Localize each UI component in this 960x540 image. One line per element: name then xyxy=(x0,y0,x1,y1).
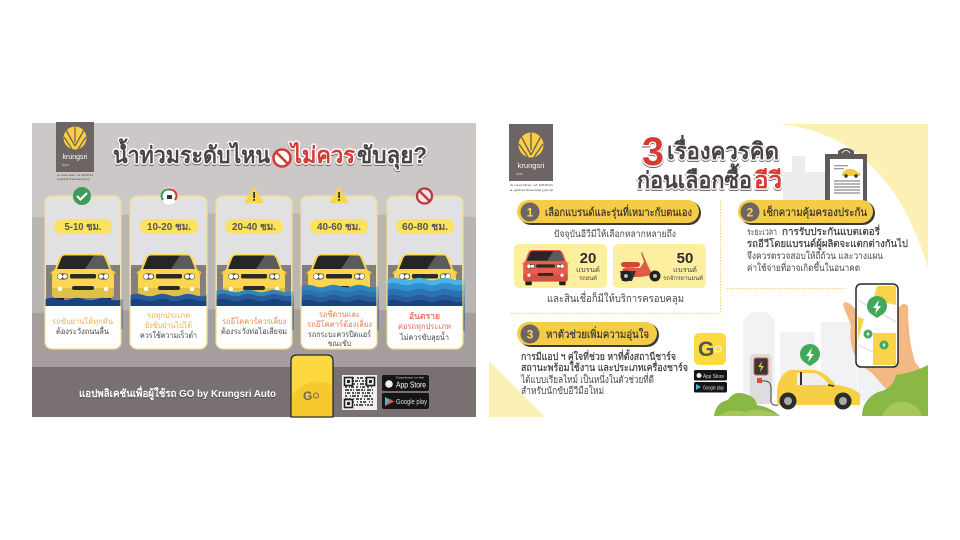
text: card note: ขณะขับ xyxy=(328,339,351,348)
pill: step 2 heading: 2 xyxy=(747,206,754,220)
title: three things to consider: ก่อนเลือกซื้อ xyxy=(637,163,752,193)
text: card note xyxy=(140,311,197,340)
text: card note: อันตราย xyxy=(409,311,440,321)
text: card note xyxy=(307,310,372,348)
box: motorcycle brands xyxy=(613,244,706,288)
box: motorcycle brands: แบรนด์ xyxy=(673,266,697,274)
text: step 2 body: รถอีวีโดยแบรนด์ผู้ผลิตจะแตกต่างกันไป xyxy=(747,237,908,250)
logo: krungsri auto: a global financial group xyxy=(57,177,90,181)
box: car brands: 20 xyxy=(580,250,596,267)
badge: app store: App Store xyxy=(396,380,426,390)
logo: krungsri auto: A member of MUFG xyxy=(510,183,554,187)
text: card note: ต้องระวังท่อไอเสียจม xyxy=(221,327,287,336)
label: depth xyxy=(396,219,454,234)
logo: krungsri auto: krungsri xyxy=(518,161,545,170)
badge: app store xyxy=(694,370,727,380)
text: step 3 body: การมีแอป ฯ คู่ใจที่ช่วย หาที่ตั้งสถานีชาร์จ xyxy=(521,349,676,363)
box: motorcycle brands: รถจักรยานยนต์ xyxy=(663,275,703,282)
text: card note: รถทุกประเภท xyxy=(147,311,190,320)
text: step 2 body: ระยะเวลา xyxy=(747,227,777,238)
card: 5-10 cm xyxy=(45,187,122,349)
card: 60-80 cm xyxy=(387,188,464,349)
icon: prohibition sign xyxy=(274,150,290,166)
icon: no entry xyxy=(417,188,432,204)
text: step 3 body: สำหรับนักขับอีวีมือใหม่ xyxy=(521,385,604,397)
panel: ev buying tips xyxy=(489,124,928,417)
text: card note: ต้องระวังถนนลื่น xyxy=(56,325,109,336)
text: step 2 body: การรับประกันแบตเตอรี่ xyxy=(782,224,881,238)
pill: step 1 heading: 1 xyxy=(527,206,534,220)
text: card note: รถอีโคคาร์ต้องเลี่ยง xyxy=(307,318,372,329)
text: card note: รถขับผ่านได้ทุกคัน xyxy=(52,317,113,326)
badge: app store xyxy=(382,375,429,391)
text: step 3 body xyxy=(520,349,688,397)
box: car brands xyxy=(514,244,607,288)
text: card note xyxy=(221,315,287,336)
box: car brands: รถยนต์ xyxy=(579,275,597,282)
title: flood level heading: ไม่ควร xyxy=(288,141,356,168)
panel: flood depth infographic xyxy=(32,122,476,417)
text: card note: รถกระบะควรปิดแอร์ xyxy=(308,329,372,339)
text: card note: ไม่ควรขับลุยน้ำ xyxy=(399,331,449,342)
text: credit available: และสินเชื่อก็มีให้บริการครอบคลุม xyxy=(547,291,684,305)
text: card note: ต่อรถทุกประเภท xyxy=(398,322,451,331)
illustration: yellow ev car xyxy=(777,370,860,410)
illustration: city buildings xyxy=(743,312,888,400)
illustration: green bushes xyxy=(714,365,928,416)
badge: google play xyxy=(382,393,429,409)
label: depth: 40-60 ชม. xyxy=(317,222,361,233)
pill: step 2 heading xyxy=(738,200,875,225)
badge: app store: Download on the xyxy=(396,376,424,380)
badge: google play: Google play xyxy=(396,399,427,406)
text: step 2 body: ค่าใช้จ่ายที่อาจเกิดขึ้นในอนาคต xyxy=(747,261,860,274)
text: card note: รถซีดานและ xyxy=(319,310,360,319)
box: motorcycle brands: 50 xyxy=(677,250,693,267)
icon: green check xyxy=(73,187,91,205)
pill: step 3 heading: หาตัวช่วยเพิ่มความอุ่นใจ xyxy=(546,326,649,341)
title: three things to consider xyxy=(637,130,782,193)
illustration: charger xyxy=(750,354,778,405)
label: depth xyxy=(140,219,198,234)
icon: go app xyxy=(694,333,726,365)
text: app banner: แอปพลิเคชันเพื่อผู้ใช้รถ GO by Krungsri Auto xyxy=(79,385,276,401)
icon: speed gauge xyxy=(160,188,178,204)
icon: warning xyxy=(330,188,348,202)
icon: charging pin xyxy=(800,344,820,366)
icon: red scooter xyxy=(620,252,660,282)
box: car brands: แบรนด์ xyxy=(576,266,600,274)
pill: step 3 heading xyxy=(517,322,659,347)
logo: krungsri auto: a global financial group xyxy=(510,188,553,192)
icon: smartphone map xyxy=(856,284,898,367)
title: flood level heading xyxy=(113,138,427,170)
title: flood level heading: ขับลุย? xyxy=(357,142,427,170)
text: card note xyxy=(52,317,113,336)
label: depth: 20-40 ชม. xyxy=(232,222,276,233)
pill: step 1 heading: เลือกแบรนด์และรุ่นที่เหมาะกับตนเอง xyxy=(545,204,692,219)
text: card note: ยังขับผ่านไปได้ xyxy=(145,321,192,330)
badge: google play xyxy=(694,382,727,392)
label: depth xyxy=(54,219,112,234)
logo: krungsri auto: krungsri xyxy=(63,154,88,161)
logo: krungsri auto: Auto xyxy=(62,163,69,167)
card: 10-20 cm xyxy=(130,188,207,349)
text: step 3 body: สถานะพร้อมใช้งาน และประเภทเครื่องชาร์จ xyxy=(521,360,688,374)
text: card note: ควรใช้ความเร็วต่ำ xyxy=(140,329,197,340)
logo: krungsri auto: Auto xyxy=(516,172,523,176)
label: depth: 5-10 ชม. xyxy=(64,222,102,233)
text: step 3 body: ได้แบบเรียลไทม์ เป็นหนึ่งในตัวช่วยที่ดี xyxy=(520,372,654,386)
logo: krungsri auto xyxy=(56,122,94,181)
title: three things to consider: เรื่องควรคิด xyxy=(667,134,779,164)
phone: go app: G xyxy=(303,389,312,403)
pill: step 2 heading: เช็กความคุ้มครองประกัน xyxy=(763,205,867,219)
badge: app store: App Store xyxy=(703,374,724,380)
title: flood level heading: น้ำท่วมระดับไหน xyxy=(113,138,270,168)
text: card note xyxy=(398,311,451,342)
icon: warning xyxy=(246,188,262,202)
phone: go app xyxy=(291,355,333,417)
text: step 2 body: จึงควรตรวจสอบให้ถี่ถ้วน และวางแผน xyxy=(747,249,883,262)
logo: krungsri auto: A member of MUFG xyxy=(57,173,93,177)
qr code xyxy=(342,375,377,410)
title: three things to consider: 3 xyxy=(642,130,664,174)
text: card note: รถอีโคคาร์ควรเลี่ยง xyxy=(222,315,286,326)
logo: krungsri auto xyxy=(509,124,554,192)
text: step 1 intro: ปัจจุบันอีวีมีให้เลือกหลากหลายถึง xyxy=(554,228,676,240)
pill: step 3 heading: 3 xyxy=(527,328,534,342)
label: depth xyxy=(310,219,368,234)
label: depth: 60-80 ชม. xyxy=(402,222,448,233)
pill: step 1 heading xyxy=(517,200,701,225)
card: 20-40 cm xyxy=(216,188,293,349)
title: three things to consider: อีวี xyxy=(754,167,782,193)
icon: go app: G xyxy=(698,338,714,361)
card: 40-60 cm xyxy=(301,188,378,349)
label: depth xyxy=(225,219,283,234)
text: step 2 body xyxy=(747,224,908,274)
label: depth: 10-20 ชม. xyxy=(147,222,191,233)
badge: google play: Google play xyxy=(703,386,724,392)
illustration: buildings and clipboard xyxy=(783,148,867,205)
illustration: hand holding phone xyxy=(843,284,928,405)
